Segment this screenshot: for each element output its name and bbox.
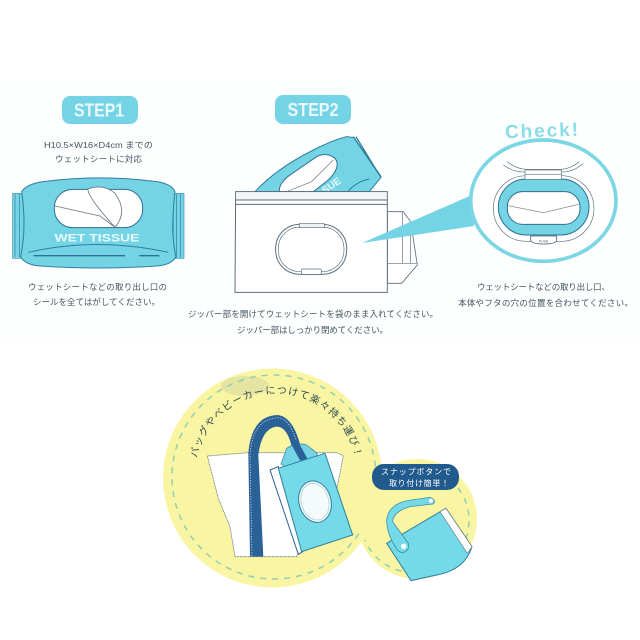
yellow circle xyxy=(163,368,382,588)
callout: snap button xyxy=(372,464,459,490)
step 1 instruction text: ウェットシートなどの取り出し口の xyxy=(28,282,167,292)
check instruction text xyxy=(458,282,633,308)
step 1 instruction text: シールを全てはがしてください。 xyxy=(33,297,160,307)
step 1 size text: H10.5×W16×D4cm までの xyxy=(44,140,153,150)
callout: snap button: 取り付け簡単！ xyxy=(389,478,449,488)
panel: bag illustration circle xyxy=(163,368,382,588)
icon: tote bag xyxy=(207,415,353,557)
dashed ring xyxy=(172,375,376,579)
callout pointer xyxy=(362,195,474,243)
tissue pack going into pouch: SUE xyxy=(320,176,344,197)
tissue pack going into pouch xyxy=(255,137,381,197)
pouch window xyxy=(276,224,347,274)
icon: magnified window: PUSH xyxy=(539,239,549,243)
step 2 instruction text: ジッパー部を開けてウェットシートを袋のまま入れてください。 xyxy=(188,309,438,319)
step 1 size text: ウェットシートに対応 xyxy=(55,154,142,164)
icon: pouch with snap strap xyxy=(387,497,472,581)
panel: snap button circle xyxy=(357,459,477,581)
dashed ring xyxy=(365,488,469,572)
yellow circle xyxy=(357,459,477,579)
heading: Check!: Check! xyxy=(505,120,578,143)
step 1 size text xyxy=(44,140,153,164)
step 2 badge xyxy=(275,95,351,124)
check instruction text: ウェットシートなどの取り出し口、 xyxy=(477,282,610,292)
callout: snap button: スナップボタンで xyxy=(381,468,451,476)
step 2 badge: STEP2 xyxy=(288,100,338,120)
print smudge xyxy=(221,376,269,396)
icon: magnified window xyxy=(471,140,616,261)
curved caption: バッグやベビーカーにつけて楽々持ち運び！ xyxy=(191,386,362,458)
step 1 instruction text xyxy=(28,282,167,307)
step 1 badge: STEP1 xyxy=(74,100,124,120)
pouch side gusset xyxy=(387,212,417,283)
check instruction text: 本体やフタの穴の位置を合わせてください。 xyxy=(458,298,633,308)
icon: wet tissue pack xyxy=(13,178,184,268)
panel: step 2 xyxy=(188,95,438,335)
step 2 instruction text xyxy=(188,309,438,335)
step 1 badge xyxy=(62,96,138,124)
panel: check callout xyxy=(362,120,633,308)
icon: pouch with pack inserted xyxy=(235,137,417,292)
step 2 instruction text: ジッパー部はしっかり閉めてください。 xyxy=(237,325,388,335)
icon: wet tissue pack: WET TISSUE xyxy=(54,233,139,245)
panel: step 1 xyxy=(13,96,184,307)
pouch body xyxy=(235,192,387,292)
